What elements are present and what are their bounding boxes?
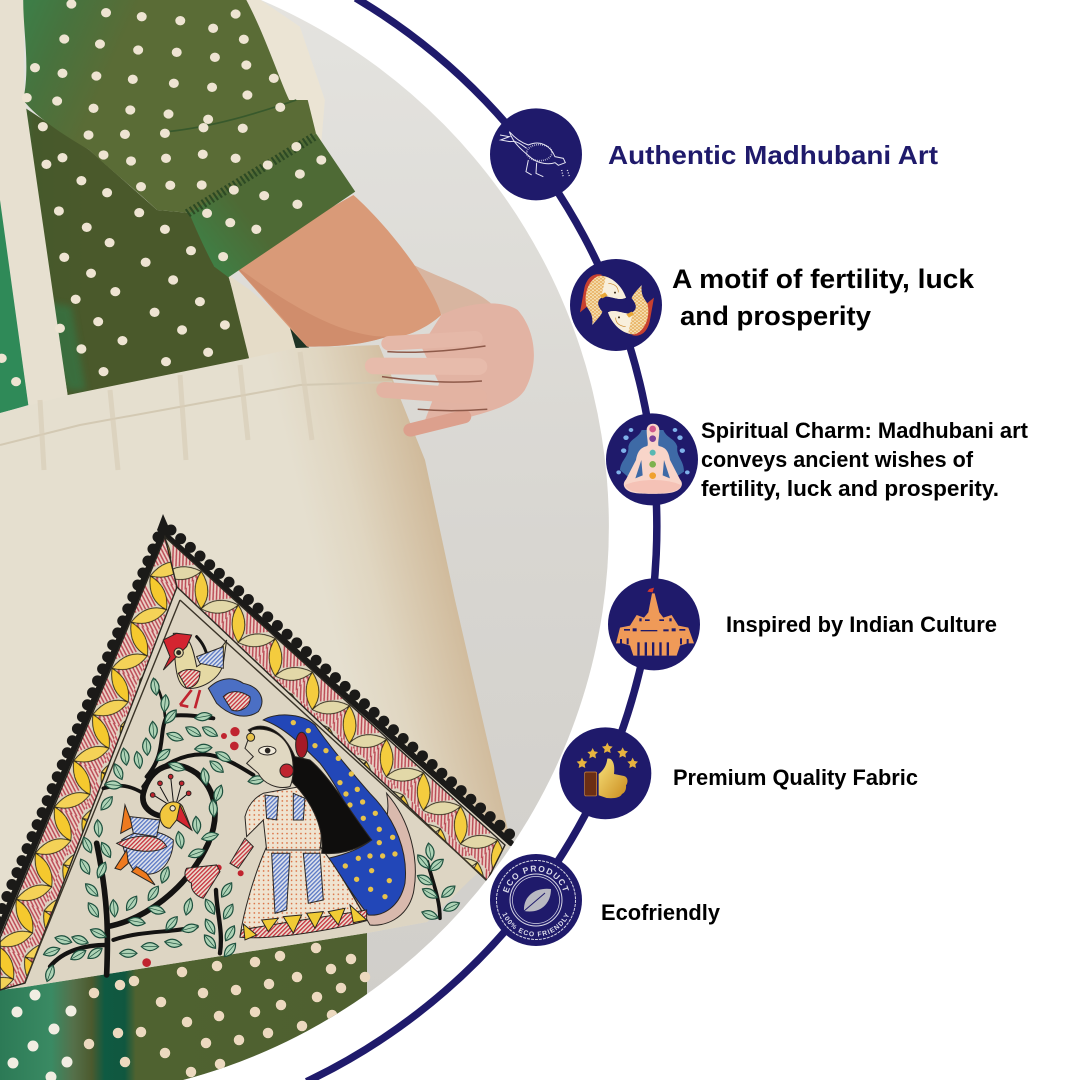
dark gap beside strap	[290, 328, 309, 348]
bird line drawing	[500, 132, 569, 177]
badge circle	[606, 413, 698, 505]
dress fabric	[0, 933, 367, 1080]
small bird	[163, 633, 262, 716]
text: inspired by indian culture: Inspired by Indian Culture	[726, 612, 997, 637]
finger 2	[365, 358, 435, 375]
finger creases	[382, 346, 487, 411]
badge circle	[490, 108, 582, 200]
arm shade	[239, 270, 386, 347]
icon: temple	[608, 578, 700, 670]
energy aura	[620, 430, 684, 480]
right petal band	[165, 537, 505, 881]
icon: eco product stamp	[490, 854, 582, 946]
dupatta yellow dots	[291, 720, 398, 899]
tree branches	[50, 637, 440, 975]
bag pleats	[40, 352, 312, 470]
polka dots	[2, 4, 321, 382]
bag top seam	[0, 382, 392, 445]
hair	[248, 726, 372, 854]
panel base	[0, 530, 511, 990]
forearm	[230, 838, 253, 868]
white dots	[13, 995, 71, 1077]
icon: madhubani peacock	[490, 108, 582, 200]
text: spiritual charm: conveys ancient wishes of	[701, 447, 974, 472]
eco top lettering: ECO PRODUCT	[502, 866, 569, 893]
text: spiritual charm: fertility, luck and prosperity.	[701, 476, 999, 501]
text: motif of fertility: A motif of fertility, luck	[672, 264, 975, 294]
peacock	[115, 774, 192, 885]
photo: woman carrying madhubani tote bag	[0, 0, 640, 1080]
left petal band	[0, 537, 177, 990]
badge circle	[559, 727, 651, 819]
blouse panel	[265, 793, 305, 820]
face	[245, 729, 293, 788]
heading: authentic madhubani art: Authentic Madhubani Art	[608, 140, 938, 170]
meditating figure	[624, 424, 682, 494]
flag	[647, 588, 654, 592]
cuff gathers	[187, 137, 314, 213]
skirt	[240, 847, 367, 937]
back forearm	[414, 266, 491, 315]
five stars	[577, 743, 638, 768]
lower fish	[608, 285, 654, 336]
forehead ornament	[247, 733, 255, 741]
left bag strap	[0, 0, 68, 407]
icon: thumbs up with stars	[559, 727, 651, 819]
finger 3	[385, 390, 478, 397]
temple silhouette	[616, 593, 694, 656]
legs	[625, 480, 681, 493]
badge circle	[608, 578, 700, 670]
dress body	[23, 107, 253, 397]
painted scene, zoom coordinates	[42, 633, 461, 983]
chakra dots	[649, 426, 656, 479]
lower dress	[0, 933, 367, 1080]
wall backdrop	[0, 0, 640, 1080]
badge circle	[490, 854, 582, 946]
madhubani triangle artwork	[0, 514, 514, 990]
hair at top	[246, 0, 325, 143]
aura drops	[616, 428, 690, 474]
earring	[280, 764, 293, 777]
eco bottom lettering: 100% ECO FRIENDLY	[502, 912, 569, 936]
right bag strap	[228, 275, 298, 362]
upper body, sleeve and arm	[0, 0, 491, 413]
temple windows	[620, 618, 689, 656]
finger 1	[389, 338, 475, 343]
hair flower	[296, 732, 308, 758]
upper fish	[580, 274, 626, 325]
eye	[259, 746, 276, 755]
side sliver of dress	[0, 197, 29, 413]
arm gaps	[635, 460, 670, 478]
dress green highlights	[54, 303, 85, 390]
text: spiritual charm: Spiritual Charm: Madhubani art	[701, 418, 1029, 443]
back of hand	[421, 303, 534, 430]
sleeve cuff	[189, 133, 355, 277]
blue dupatta	[263, 715, 406, 915]
puffed sleeve	[23, 0, 316, 213]
skirt stripes	[272, 853, 323, 913]
blouse	[245, 787, 321, 850]
skirt triangles	[243, 905, 367, 940]
dupatta border	[333, 793, 415, 925]
arm	[232, 195, 441, 347]
flower	[185, 865, 220, 898]
peach dots	[89, 948, 365, 1072]
thumb hand	[599, 758, 628, 798]
cuff	[585, 772, 597, 796]
text: motif of fertility: and prosperity	[680, 301, 871, 331]
inner frame	[25, 600, 487, 982]
text: premium quality fabric: Premium Quality Fabric	[673, 765, 918, 790]
stamp rings	[496, 860, 576, 940]
leaf vein	[524, 893, 545, 911]
woman figure	[230, 715, 415, 940]
text: motif of fertility	[672, 264, 975, 331]
apex finial	[157, 514, 168, 532]
pupil	[265, 748, 270, 753]
red berries	[142, 727, 244, 967]
badge circle	[570, 259, 662, 351]
leaf	[524, 889, 551, 912]
text: spiritual charm	[701, 418, 1029, 501]
icon: meditation chakras	[606, 413, 698, 505]
navy timeline arc	[310, 0, 657, 1080]
black scalloped border	[0, 530, 514, 935]
tote bag body	[0, 345, 508, 917]
finger 4	[411, 417, 464, 430]
text: ecofriendly: Ecofriendly	[601, 900, 721, 925]
tree leaves	[42, 677, 461, 983]
icon: two fish	[570, 259, 662, 351]
skirt hem hatch	[240, 910, 367, 938]
sleeve fold	[168, 100, 296, 132]
hand	[374, 303, 534, 430]
